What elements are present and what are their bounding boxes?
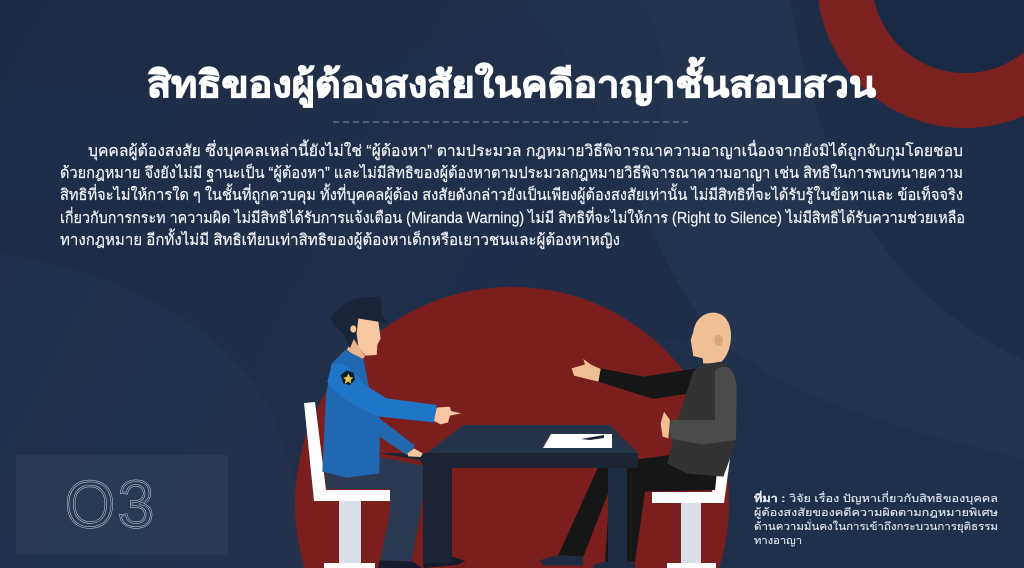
officer figure	[322, 297, 461, 478]
officer face	[357, 318, 381, 356]
number 03: 3	[118, 467, 154, 541]
officer hand on table	[407, 448, 423, 457]
body paragraph: บุคคลผู้ต้องสงสัย ซึ่งบุคคลเหล่านี้ยังไม่ใช่ “ผู้ต้องหา” ตามประมวล กฎหมายวิธีพิจารณาความอาญาเนื่องจากยังมิได้ถูกจับกุมโดยชอบ	[88, 139, 963, 161]
body paragraph: ทางกฎหมาย อีกทั้งไม่มี สิทธิเทียบเท่าสิทธิของผู้ต้องหาเด็กหรือเยาวชนและผู้ต้องหาหญิง	[60, 228, 620, 250]
decorative red ring	[818, 0, 1024, 128]
officer pointing hand	[434, 407, 461, 424]
officer far arm	[377, 417, 415, 455]
number 03	[65, 467, 154, 541]
big red circle	[295, 287, 729, 568]
title: สิทธิของผู้ต้องสงสัยในคดีอาญาชั้นสอบสวน	[147, 57, 876, 108]
suspect sleeve	[669, 367, 737, 444]
number 03: O	[65, 467, 115, 541]
officer badge	[341, 370, 355, 385]
source note	[754, 490, 998, 547]
suspect legs	[540, 455, 717, 568]
source note: ด้านความมั่นคงในการเข้าถึงกระบวนการยุติธรรม	[754, 519, 998, 533]
officer legs	[325, 457, 466, 568]
suspect head	[691, 313, 731, 364]
suspect torso	[667, 363, 735, 477]
officer hat and hair	[330, 297, 389, 348]
suspect outstretched arm	[598, 368, 697, 399]
source note: ที่มา : วิจัย เรื่อง ปัญหาเกี่ยวกับสิทธิของบุคคล	[754, 490, 998, 505]
left chair	[304, 402, 390, 568]
body paragraph	[60, 139, 965, 250]
body paragraph: สิทธิที่จะไม่ให้การใด ๆ ในชั้นที่ถูกควบคุม ทั้งที่บุคคลผู้ต้อง สงสัยดังกล่าวยังเป็นเพียงผู้ต้องสงสัยเท่านั้น ไม่มีสิทธิที่จะได้รับรู้ในข้อหาและ ข้อเท็จจริง	[60, 183, 963, 205]
number 03: O	[65, 467, 115, 541]
officer neck	[347, 338, 365, 360]
suspect open hand	[572, 359, 601, 382]
officer jacket	[322, 350, 380, 478]
body paragraph: เกี่ยวกับการกระท าความผิด ไม่มีสิทธิได้รับการแจ้งเตือน (Miranda Warning) ไม่มี สิทธิที่จะไม่ให้การ (Right to Silence) ไม่มีสิทธิได้รับความช่วยเหลือ	[60, 207, 965, 227]
number 03: 3	[118, 467, 154, 541]
number panel	[16, 455, 228, 555]
officer near arm	[327, 364, 437, 422]
officer ear	[350, 325, 356, 333]
suspect ear	[714, 335, 723, 346]
body paragraph: ด้วยกฎหมาย จึงยังไม่มี ฐานะเป็น “ผู้ต้องหา” และไม่มีสิทธิของผู้ต้องหาตามประมวลกฎหมายวิธีพิจารณาความอาญา เช่น สิทธิในการพบทนายความ	[60, 163, 963, 183]
paper and pen on table	[543, 434, 612, 448]
right chair	[652, 444, 732, 568]
suspect raised hand	[661, 412, 670, 438]
table	[378, 425, 638, 568]
source note: ผู้ต้องสงสัยของคดีความผิดตามกฎหมายพิเศษ	[754, 506, 998, 519]
suspect figure	[572, 313, 737, 477]
source note: ทางอาญา	[754, 535, 802, 547]
